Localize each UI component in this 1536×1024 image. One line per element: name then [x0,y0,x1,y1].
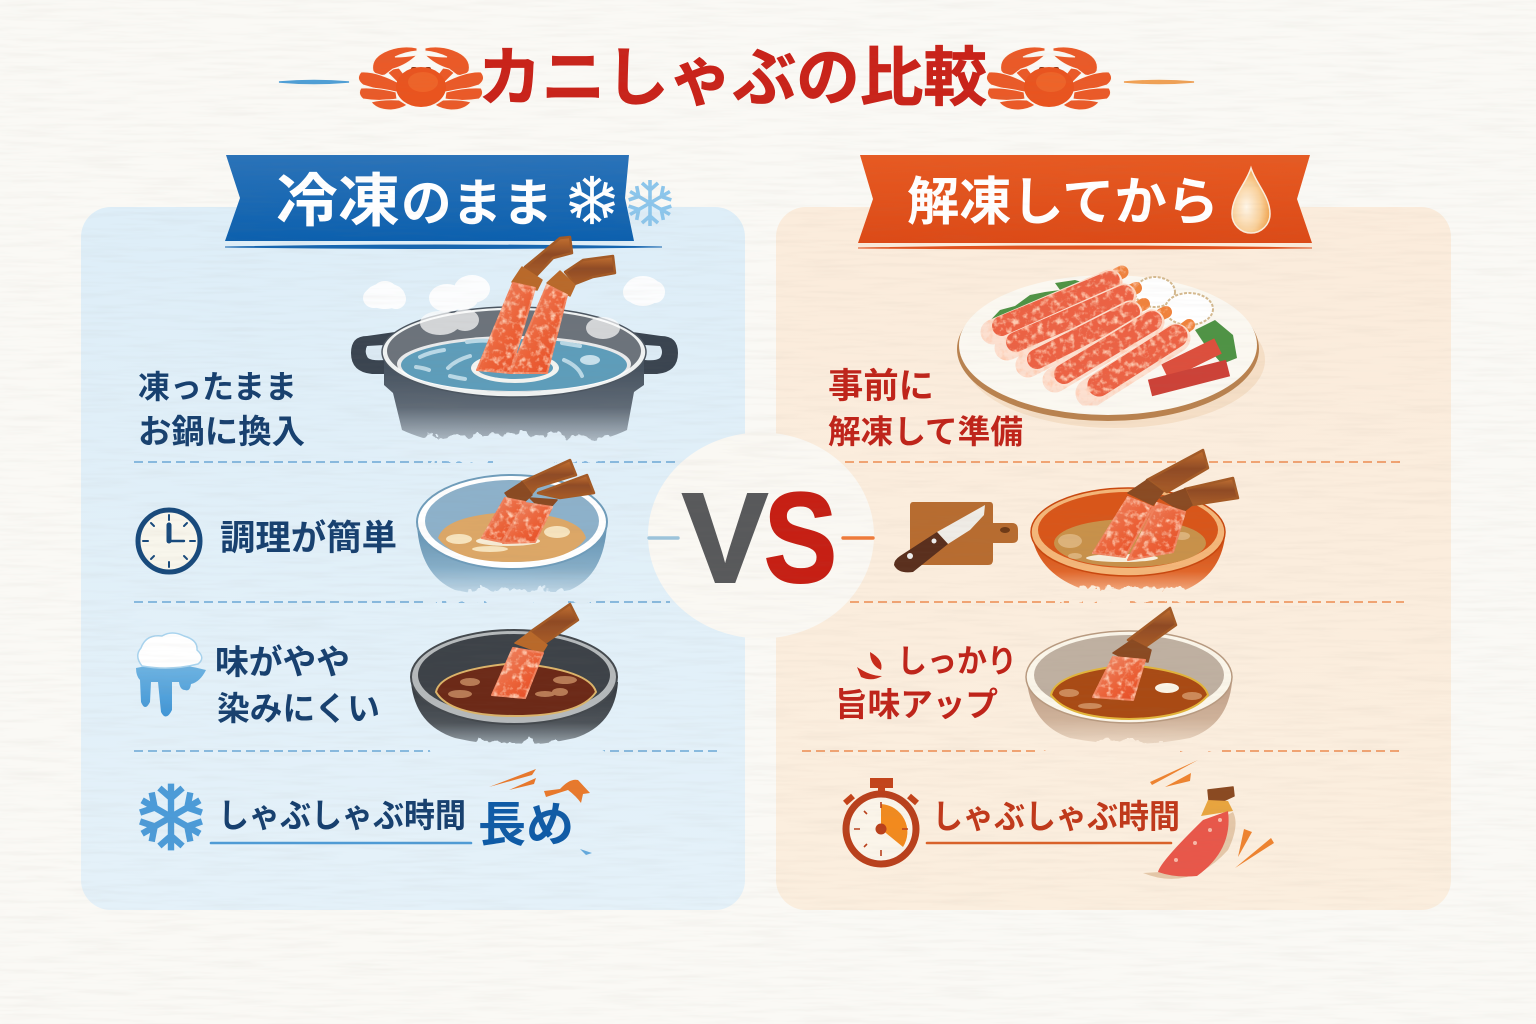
text: flavor absorbs less: 味がやや [215,643,350,682]
text: easy to cook: 調理が簡単 [220,519,397,558]
text: thaw in advance: 解凍して準備 [828,414,1023,450]
steam on rim [420,309,620,339]
motion marks [1150,760,1274,868]
text: flavor up: しっかり [897,643,1017,679]
crab leg [492,604,578,698]
icon: water drop [1232,168,1270,233]
text: longer: 長め [478,799,574,852]
title accent line left [279,80,349,84]
icon: cutting board and knife [894,502,1018,572]
VS text S: S [764,467,837,610]
text: flavor absorbs less: 染みにくい [217,690,380,727]
text: shabu-shabu time: しゃぶしゃぶ時間 [218,797,466,834]
illustration: swishing crab leg [1143,760,1274,879]
VS text V: V [682,467,768,610]
panel background orange [776,207,1451,910]
panel: thawed [776,155,1451,910]
text: flavor up: 旨味アップ [835,686,998,723]
icon: crab right [986,47,1112,110]
illustration: orange bowl with crab legs [1031,450,1238,603]
banner: frozen [225,155,674,248]
illustration: blue bowl with crab legs [417,460,607,605]
icon: light blue snowflake [626,180,674,226]
title block [279,42,1194,114]
illustration: dark bowl with crab leg [411,604,618,759]
text: flavor up [835,643,1017,723]
icon: white snowflake [567,176,617,224]
text: thaw in advance: 事前に [828,367,934,406]
daikon garnish [1135,277,1213,325]
text: shabu-shabu time: しゃぶしゃぶ時間 [932,798,1180,835]
title text: カニしゃぶの比較 [478,42,987,114]
row dividers orange [802,462,1404,751]
icon: crab left [358,47,484,110]
underline [211,842,471,844]
panel background blue [81,207,745,910]
icon: stopwatch [845,778,917,864]
illustration: beige bowl with crab leg [1026,608,1232,757]
illustration: pot with crab legs [351,237,678,464]
title accent line right [1124,80,1194,84]
icon: motion marks and small crab leg [489,769,592,855]
icon: blue snowflake [136,784,206,850]
banner heading: 解凍してから [907,174,1219,232]
banner: thawed [858,155,1312,249]
crab leg pair [477,237,615,373]
steam clouds [363,275,665,312]
VS badge [648,432,874,638]
text: flavor absorbs less [215,643,380,727]
text: put in pot while frozen [138,369,305,450]
banner heading: 冷凍のまま [276,169,553,234]
text: put in pot while frozen: 凍ったまま [138,369,297,405]
icon: icicle [136,633,206,717]
row dividers blue [134,462,722,751]
text: put in pot while frozen: お鍋に換入 [138,413,305,450]
connector tick orange [843,536,873,540]
lettuce leaves [985,280,1237,364]
icon: umami swoosh [857,652,882,679]
illustration: plate of thawed crab [957,272,1265,428]
icon: clock [138,510,200,572]
crab leg [1093,608,1176,700]
crab leg pair [1093,450,1238,560]
text: thaw in advance [828,367,1023,450]
red crab pieces behind [1150,346,1228,388]
crab leg pair [482,460,594,543]
underline [927,842,1171,844]
connector tick blue [649,536,678,540]
panel: frozen [81,155,745,910]
crab legs on plate [993,272,1189,393]
